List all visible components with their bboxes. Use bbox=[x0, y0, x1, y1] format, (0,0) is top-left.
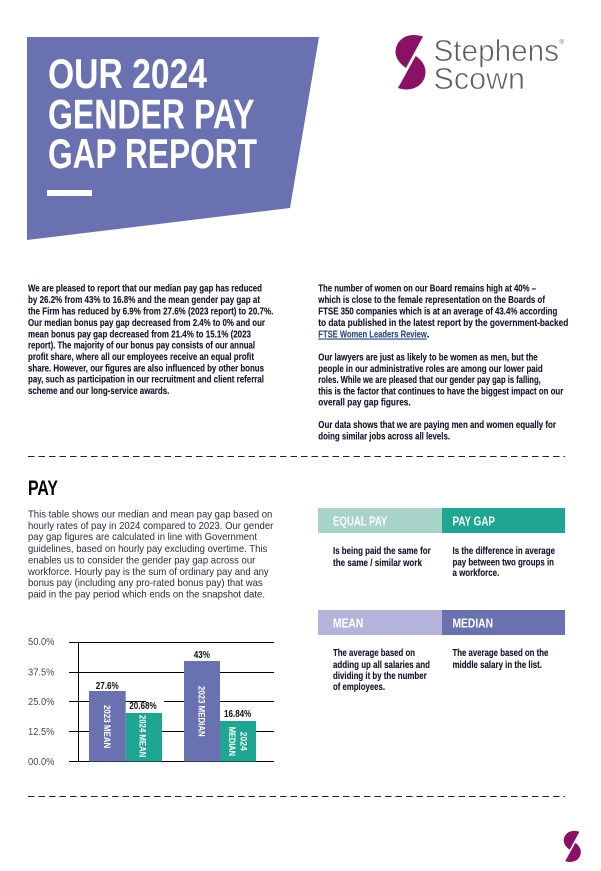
intro text left column: the Firm has reduced by 6.9% from 27.6% (2023 report) to 20.7%. bbox=[28, 306, 273, 317]
panel: median definition: MEDIAN bbox=[452, 615, 493, 630]
pay description paragraph bbox=[27, 510, 274, 600]
bar: 2024 median bbox=[220, 709, 256, 762]
panel: pay gap definition bbox=[442, 508, 565, 579]
panel: equal pay definition: EQUAL PAY bbox=[333, 513, 388, 528]
panel: mean definition: The average based on bbox=[333, 648, 415, 659]
intro text right column bbox=[318, 284, 568, 442]
bar: 2024 median: 16.84% bbox=[224, 709, 251, 720]
bar: 2024 median: MEDIAN bbox=[226, 727, 237, 756]
pay description paragraph: This table shows our median and mean pay gap based on bbox=[28, 510, 272, 520]
intro text right column: people in our administrative roles are among our lower paid bbox=[318, 364, 543, 375]
logo: Stephens Scown: Scown bbox=[434, 61, 525, 96]
y axis labels: 00.0% bbox=[28, 757, 55, 768]
intro text left column: We are pleased to report that our median pay gap has reduced bbox=[28, 284, 262, 294]
intro text left column: mean bonus pay gap decreased from 21.4% to 15.1% (2023 bbox=[28, 329, 251, 340]
logo: Stephens Scown: Stephens bbox=[434, 33, 559, 68]
logo: Stephens Scown bbox=[396, 33, 564, 96]
panel: pay gap definition: a workforce. bbox=[452, 568, 499, 579]
pay description paragraph: bonus pay (including any pro-rated bonus pay) that was bbox=[28, 578, 263, 589]
pay description paragraph: paid in the pay period which ends on the snapshot date. bbox=[28, 590, 265, 600]
intro text right column: FTSE Women Leaders Review bbox=[318, 330, 427, 340]
bar: 2023 mean: 2023 MEAN bbox=[101, 705, 112, 748]
panel: mean definition bbox=[318, 610, 442, 693]
intro text left column: by 26.2% from 43% to 16.8% and the mean gender pay gap at bbox=[28, 295, 260, 306]
intro text right column: . bbox=[427, 330, 430, 340]
icon: footer logo mark bbox=[564, 831, 581, 862]
pay description paragraph: enables us to consider the gender pay gap across our bbox=[28, 556, 256, 566]
bar: 2024 mean: 20.68% bbox=[129, 701, 157, 712]
title: GENDER PAY bbox=[48, 90, 254, 137]
panel: mean definition: of employees. bbox=[333, 682, 385, 693]
intro text right column: The number of women on our Board remains high at 40% – bbox=[318, 284, 536, 294]
panel: mean definition: adding up all salaries and bbox=[333, 660, 430, 671]
intro text left column: profit share, where all our employees receive an equal profit bbox=[28, 352, 254, 363]
heading: PAY: PAY bbox=[28, 477, 58, 500]
bar: 2023 median bbox=[184, 650, 220, 762]
bar: 2023 median: 2023 MEDIAN bbox=[196, 686, 207, 737]
pay description paragraph: guidelines, based on hourly pay excluding overtime. This bbox=[28, 544, 267, 555]
y axis labels: 12.5% bbox=[28, 727, 55, 738]
intro text left column: pay, such as participation in our recruitment and client referral bbox=[28, 375, 264, 386]
title: OUR 2024 bbox=[48, 50, 208, 97]
logo: Stephens Scown: ® bbox=[560, 39, 564, 46]
panel: mean definition: MEAN bbox=[333, 615, 363, 630]
intro text left column: scheme and our long-service awards. bbox=[28, 386, 169, 397]
panel: mean definition: dividing it by the number bbox=[333, 671, 427, 682]
y axis labels bbox=[28, 637, 55, 768]
panel: median definition: The average based on the bbox=[452, 648, 549, 659]
y axis labels: 37.5% bbox=[28, 668, 55, 678]
bar: 2023 mean: 27.6% bbox=[96, 681, 119, 692]
panel: pay gap definition: Is the difference in average bbox=[452, 546, 555, 557]
pay description paragraph: pay gap figures are calculated in line with Government bbox=[28, 532, 257, 543]
panel: equal pay definition: Is being paid the same for bbox=[333, 546, 431, 557]
panel: pay gap definition: PAY GAP bbox=[452, 513, 495, 528]
intro text right column: Our lawyers are just as likely to be women as men, but the bbox=[318, 353, 538, 364]
intro text left column: report). The majority of our bonus pay consists of our annual bbox=[28, 340, 255, 351]
intro text right column: overall pay gap figures. bbox=[318, 398, 411, 408]
bar: 2023 mean bbox=[89, 681, 126, 762]
intro text right column: doing similar jobs across all levels. bbox=[318, 432, 450, 442]
title bbox=[48, 50, 257, 177]
panel: median definition: middle salary in the list. bbox=[452, 660, 542, 671]
bar: 2023 median: 43% bbox=[194, 650, 210, 661]
panel: equal pay definition bbox=[318, 508, 442, 569]
title banner bbox=[27, 37, 319, 240]
bar: 2024 mean: 2024 MEAN bbox=[136, 715, 147, 757]
panel: median definition bbox=[442, 610, 565, 671]
pay description paragraph: workforce. Hourly pay is the sum of ordinary pay and any bbox=[27, 567, 269, 578]
panel: pay gap definition: pay between two groups in bbox=[452, 558, 554, 568]
bar chart bbox=[28, 637, 274, 768]
y axis labels: 50.0% bbox=[28, 637, 55, 648]
intro text left column: Our median bonus pay gap decreased from 2.4% to 0% and our bbox=[28, 318, 265, 329]
title: GAP REPORT bbox=[48, 130, 257, 177]
pay description paragraph: hourly rates of pay in 2024 compared to 2023. Our gender bbox=[28, 521, 274, 532]
intro text left column: share. However, our figures are also influenced by other bonus bbox=[28, 363, 264, 374]
y axis labels: 25.0% bbox=[28, 697, 55, 708]
intro text left column bbox=[28, 284, 273, 397]
bar: 2024 mean bbox=[126, 701, 162, 762]
bar: 2024 median: 2024 bbox=[237, 732, 248, 751]
panel: equal pay definition: the same / similar work bbox=[333, 558, 422, 569]
